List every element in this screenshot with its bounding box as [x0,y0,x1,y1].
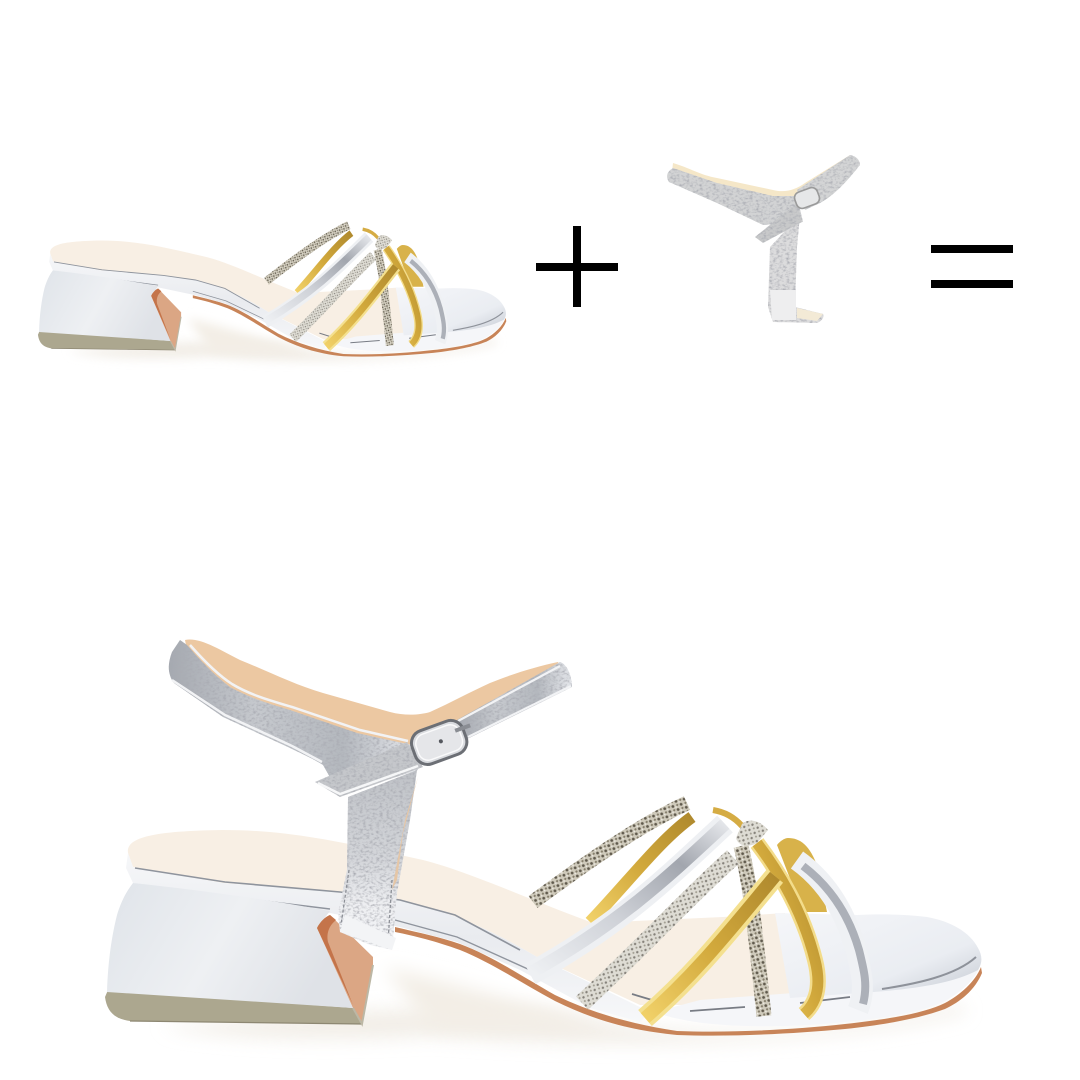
plus sign [536,226,618,307]
ankle strap lining [185,640,562,745]
ankle strap front section [457,662,572,739]
ankle strap back section [169,640,418,795]
large finished sandal [105,640,982,1044]
vertical quarter strap [338,770,417,950]
small buckle [793,186,821,210]
sandal base with straps [105,803,982,1044]
equals sign [931,245,1013,288]
buckle [408,714,478,768]
keeper strap [315,742,423,797]
small ankle strap accessory [667,155,860,323]
top-left slide sandal [38,225,506,361]
